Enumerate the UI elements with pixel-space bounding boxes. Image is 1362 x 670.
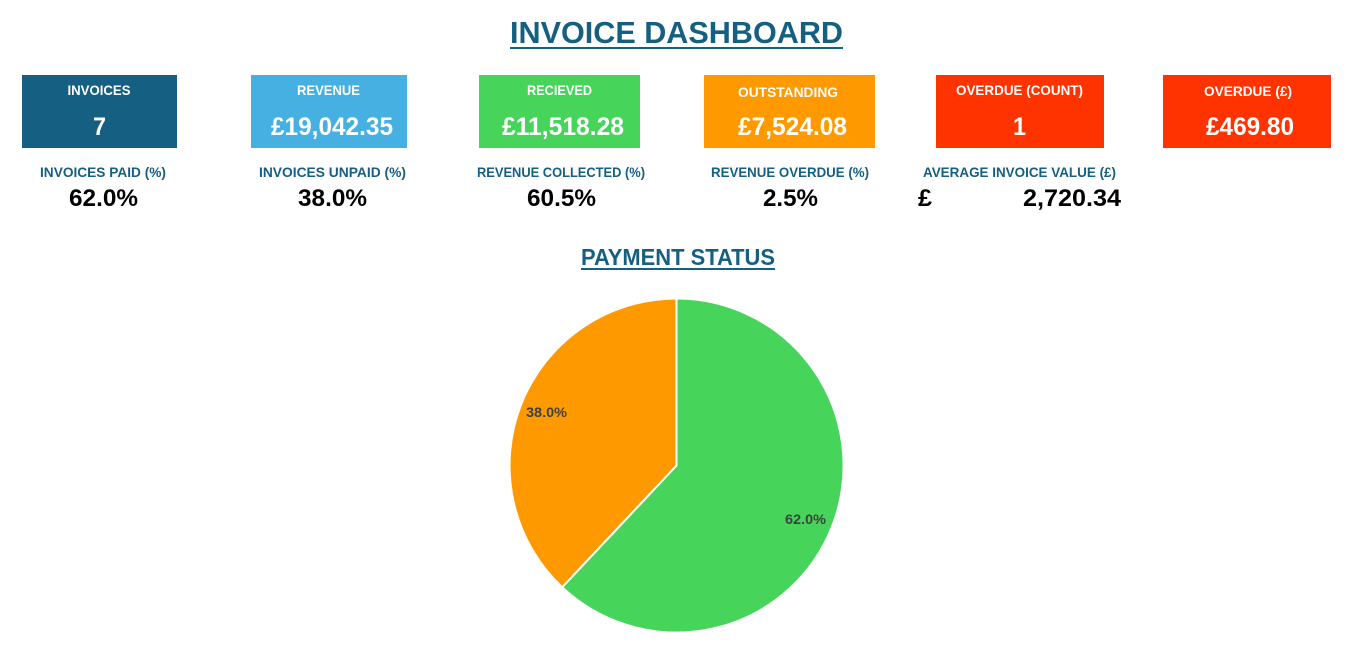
card: outstanding: OUTSTANDING bbox=[738, 84, 838, 100]
card: received: RECIEVED bbox=[527, 82, 592, 98]
label: 62.0%: 62.0% bbox=[785, 511, 827, 527]
card: invoices bbox=[22, 75, 177, 148]
pie chart: payment status bbox=[510, 298, 844, 632]
chart heading: PAYMENT STATUS bbox=[581, 244, 775, 270]
card: overdue value: £469.80 bbox=[1206, 113, 1294, 141]
card: outstanding bbox=[704, 75, 875, 148]
metric: average invoice value bbox=[918, 164, 1122, 212]
metric: revenue overdue bbox=[711, 164, 869, 212]
card: outstanding: £7,524.08 bbox=[738, 113, 847, 141]
slice: unpaid 38% bbox=[510, 298, 676, 587]
card: received bbox=[479, 75, 640, 148]
metric: invoices unpaid: 38.0% bbox=[298, 185, 367, 212]
metric: invoices paid bbox=[40, 164, 166, 212]
card: overdue value: OVERDUE (£) bbox=[1204, 83, 1292, 99]
metric: revenue collected bbox=[477, 164, 645, 212]
card: overdue count bbox=[936, 75, 1104, 148]
card: invoices: INVOICES bbox=[68, 82, 130, 98]
metric: revenue overdue: REVENUE OVERDUE (%) bbox=[711, 164, 869, 180]
card: invoices: 7 bbox=[93, 113, 106, 141]
card: overdue value bbox=[1163, 75, 1331, 148]
metric: average invoice value: AVERAGE INVOICE VALUE (£) bbox=[923, 164, 1116, 180]
title: INVOICE DASHBOARD bbox=[510, 15, 843, 50]
metric: revenue collected: 60.5% bbox=[527, 185, 596, 212]
metric: revenue collected: REVENUE COLLECTED (%) bbox=[477, 164, 645, 180]
metric: average invoice value: 2,720.34 bbox=[1023, 185, 1122, 212]
card: revenue bbox=[251, 75, 407, 148]
metric: revenue overdue: 2.5% bbox=[763, 185, 818, 212]
slice: paid 62% bbox=[562, 298, 844, 632]
card: overdue count: OVERDUE (COUNT) bbox=[956, 82, 1083, 98]
metric: invoices paid: 62.0% bbox=[69, 185, 138, 212]
card: revenue: REVENUE bbox=[297, 82, 360, 98]
metric: invoices paid: INVOICES PAID (%) bbox=[40, 164, 166, 180]
card: overdue count: 1 bbox=[1013, 113, 1026, 141]
card: revenue: £19,042.35 bbox=[271, 113, 393, 141]
metric: invoices unpaid bbox=[259, 164, 406, 212]
metric: invoices unpaid: INVOICES UNPAID (%) bbox=[259, 164, 406, 180]
label: 38.0%: 38.0% bbox=[526, 404, 568, 420]
metric: average invoice value: £ bbox=[918, 185, 933, 212]
card: received: £11,518.28 bbox=[502, 113, 624, 141]
